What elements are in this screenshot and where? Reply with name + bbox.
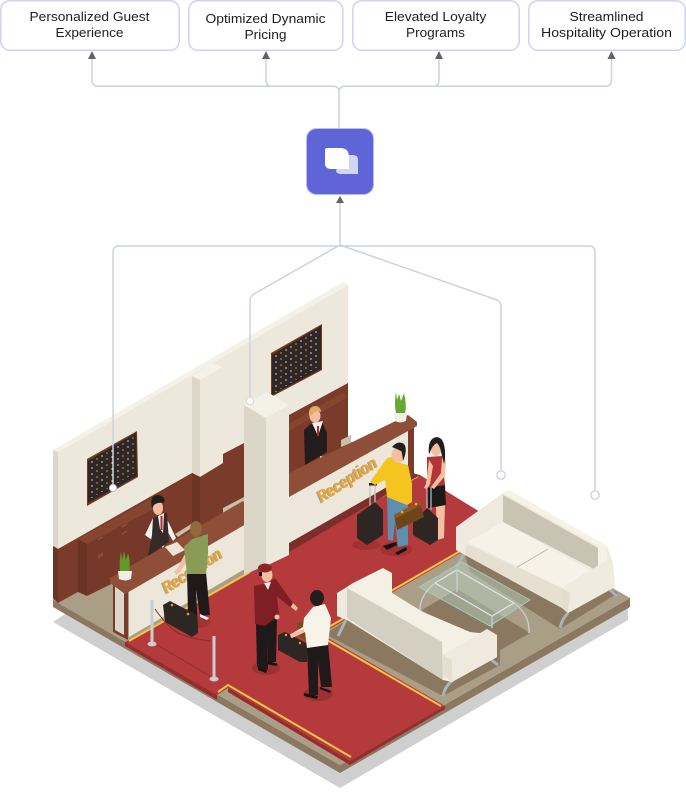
marker dots: [109, 397, 599, 499]
red carpet: [125, 475, 480, 765]
box: Elevated Loyalty Programs: Programs: [406, 25, 466, 40]
hub icon tile: [306, 128, 374, 194]
arrow: into hub from scene: [336, 196, 344, 245]
box: Streamlined Hospitality Operation: Hospitality Operation: [541, 25, 672, 40]
floor slab: [53, 440, 630, 773]
guest: man in yellow: [370, 443, 412, 556]
box: Elevated Loyalty Programs: [353, 1, 519, 50]
box: Streamlined Hospitality Operation: [529, 1, 685, 50]
briefcases by guest: [278, 620, 308, 662]
cabinet: [78, 497, 170, 596]
box: Personalized Guest Experience: Experience: [56, 25, 124, 40]
box: Optimized Dynamic Pricing: Pricing: [244, 27, 286, 42]
reception desk: right: [289, 415, 420, 552]
connector lines from scene to hub: [113, 245, 595, 490]
reception desk: right: Reception: [314, 453, 381, 506]
wood wainscot and left alcove: [53, 443, 244, 642]
sofa: back right: [456, 490, 617, 628]
lounge shadows on floor: [325, 530, 618, 696]
box: Personalized Guest Experience: [1, 1, 179, 50]
receptionist: woman: [145, 495, 176, 556]
suitcase: right, with handle: [413, 487, 438, 545]
arrows: hub up to four outcome boxes: [88, 51, 616, 128]
guest: man in white: [290, 590, 333, 701]
suitcase on floor: [163, 601, 198, 637]
floor shadow: [53, 604, 628, 788]
box: Optimized Dynamic Pricing: [189, 1, 343, 50]
wood back panel behind right desk: [289, 383, 351, 480]
suitcase: left, with handle: [352, 483, 383, 550]
guest: man in green shirt: [174, 521, 210, 630]
box: Streamlined Hospitality Operation: Streamlined: [570, 9, 644, 24]
sofa: front left: [337, 568, 498, 696]
plant: right desk: [394, 392, 407, 422]
key board: right: [271, 324, 322, 397]
column: [244, 392, 289, 575]
reception desk: left: Reception: [157, 545, 225, 598]
plant: left desk: [118, 551, 132, 580]
guest: woman in red: [424, 437, 446, 540]
reception desk: right: Reception: [312, 454, 380, 507]
box: Optimized Dynamic Pricing: Optimized Dynamic: [206, 11, 326, 26]
bellhop: [252, 564, 298, 675]
receptionist: man: [304, 406, 329, 465]
back wall: [53, 282, 348, 549]
briefcase: brown: [394, 501, 424, 530]
box: Elevated Loyalty Programs: Elevated Loyalty: [385, 9, 487, 24]
box: Personalized Guest Experience: Personalized Guest: [30, 9, 150, 24]
glass table: [419, 562, 530, 633]
reception desk: left: [110, 501, 260, 640]
key board: left: [87, 431, 138, 506]
stanchions and rope: [148, 600, 218, 682]
reception desk: left: Reception: [159, 544, 226, 597]
